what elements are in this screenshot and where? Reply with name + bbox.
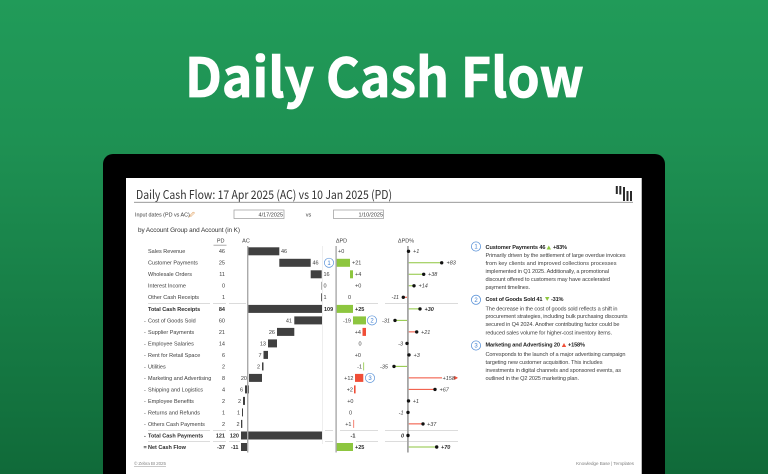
AC waterfall chart bbox=[230, 246, 333, 452]
account names: Sales Revenue bbox=[148, 249, 185, 255]
account names: Net Cash Flow bbox=[148, 445, 187, 451]
AC waterfall chart: 41 bbox=[286, 318, 292, 324]
delta PD percent lollipop chart: +1 bbox=[413, 399, 419, 405]
AC waterfall chart: 16 bbox=[324, 272, 330, 278]
commentary 3: marketing and advertising: targeting new customer acquisition. This includes bbox=[486, 360, 603, 366]
PD column: 121 bbox=[216, 433, 225, 439]
date inputs bbox=[135, 210, 384, 218]
account names: Wholesale Orders bbox=[148, 272, 192, 278]
delta PD percent lollipop chart: +14 bbox=[418, 284, 428, 290]
account names: Others Cash Payments bbox=[148, 422, 205, 428]
delta PD percent lollipop chart: -11 bbox=[391, 295, 399, 301]
commentary 3: marketing and advertising: 3 bbox=[474, 344, 478, 350]
tablet frame bbox=[103, 154, 665, 474]
separators bbox=[148, 303, 458, 442]
commentary 2: cost of goods sold: 2 bbox=[474, 298, 478, 304]
commentary 1: customer payments: implemented in Q1 2025. Additionally, a promotional bbox=[486, 269, 609, 275]
PD column: 1 bbox=[222, 410, 225, 416]
account names: Utilities bbox=[148, 364, 166, 370]
delta PD percent lollipop chart: +1 bbox=[413, 249, 419, 255]
delta PD percent lollipop chart: +83 bbox=[446, 261, 457, 267]
account names: Interest Income bbox=[148, 284, 186, 290]
PD column: 60 bbox=[219, 318, 225, 324]
PD column: 14 bbox=[219, 341, 225, 347]
account names: = bbox=[144, 445, 147, 451]
account names bbox=[144, 249, 211, 451]
delta PD waterfall chart: +2 bbox=[347, 387, 353, 393]
commentary 1: customer payments: 1 bbox=[474, 245, 478, 251]
account names: Total Cash Receipts bbox=[148, 307, 200, 313]
AC waterfall chart: 1 bbox=[237, 410, 240, 416]
PD column: 6 bbox=[222, 353, 225, 359]
delta PD waterfall chart: 0 bbox=[358, 341, 362, 347]
delta PD waterfall chart: +25 bbox=[355, 445, 364, 451]
delta PD percent lollipop chart: +37 bbox=[427, 422, 437, 428]
delta PD percent lollipop chart: +158 bbox=[442, 376, 456, 382]
column headers: ΔPD bbox=[336, 238, 347, 244]
account names: - bbox=[144, 341, 146, 347]
delta PD waterfall chart: -1 bbox=[357, 364, 362, 370]
date inputs: 1/10/2025 bbox=[359, 212, 383, 218]
account names: - bbox=[144, 433, 146, 439]
PD column: 21 bbox=[219, 330, 225, 336]
commentary 1: customer payments: Customer Payments 46 bbox=[486, 245, 546, 251]
delta PD waterfall chart bbox=[335, 246, 366, 452]
delta PD percent lollipop chart: -31 bbox=[382, 318, 390, 324]
delta PD waterfall chart: -1 bbox=[351, 433, 355, 439]
callout markers on chart: 2 bbox=[370, 319, 374, 325]
delta PD waterfall chart: 0 bbox=[349, 410, 352, 416]
PD column bbox=[216, 249, 226, 451]
PD column: 25 bbox=[219, 261, 225, 267]
account names: - bbox=[144, 353, 146, 359]
PD column: 8 bbox=[222, 376, 225, 382]
account names: Shipping and Logistics bbox=[148, 387, 203, 393]
date inputs: Input dates (PD vs AC) bbox=[135, 212, 190, 218]
account names: Total Cash Payments bbox=[148, 433, 203, 439]
date inputs: 4/17/2025 bbox=[259, 212, 283, 218]
PD column: 2 bbox=[222, 364, 225, 370]
delta PD percent lollipop chart: -3 bbox=[398, 341, 404, 347]
account names: Other Cash Receipts bbox=[148, 295, 199, 301]
account names: Marketing and Advertising bbox=[148, 376, 211, 382]
commentary 2: cost of goods sold: secured in Q4 2024. Another contributing factor could be bbox=[486, 322, 620, 328]
callout markers on chart bbox=[324, 258, 377, 382]
delta PD waterfall chart: +0 bbox=[355, 284, 361, 290]
footer links: Knowledge Base | Templates bbox=[576, 461, 635, 467]
column headers: ΔPD% bbox=[398, 238, 414, 244]
commentary 1: customer payments bbox=[471, 242, 626, 291]
delta PD percent lollipop chart: +30 bbox=[424, 307, 434, 313]
callout markers on chart: 3 bbox=[368, 376, 372, 382]
commentary 1: customer payments: payment timelines. bbox=[486, 285, 530, 291]
commentary 2: cost of goods sold: The decrease in the cost of goods sold reflects a shift in bbox=[486, 306, 618, 312]
delta PD percent lollipop chart: -35 bbox=[380, 364, 389, 370]
PD column: 2 bbox=[222, 422, 225, 428]
callout markers on chart: 1 bbox=[327, 261, 331, 267]
AC waterfall chart: 2 bbox=[257, 364, 260, 370]
column headers: AC bbox=[242, 238, 250, 244]
AC waterfall chart: 2 bbox=[238, 399, 241, 405]
column headers: PD bbox=[217, 238, 225, 244]
commentary 2: cost of goods sold: Cost of Goods Sold 41 bbox=[486, 297, 542, 303]
account names: - bbox=[144, 318, 146, 324]
table subtitle: by Account Group and Account (in K) bbox=[138, 227, 240, 234]
AC waterfall chart: 6 bbox=[240, 387, 243, 393]
commentary 1: customer payments: +83% bbox=[553, 245, 567, 251]
commentary 3: marketing and advertising: outlined in the Q2 2025 marketing plan. bbox=[486, 376, 579, 382]
delta PD waterfall chart: +0 bbox=[338, 249, 344, 255]
account names: Employee Benefits bbox=[148, 399, 194, 405]
delta PD waterfall chart: +1 bbox=[345, 422, 352, 428]
delta PD waterfall chart: +21 bbox=[352, 261, 361, 267]
report title: Daily Cash Flow: 17 Apr 2025 (AC) vs 10 Jan 2025 (PD) bbox=[136, 186, 392, 203]
delta PD waterfall chart: -19 bbox=[343, 318, 351, 324]
AC waterfall chart: 26 bbox=[269, 330, 275, 336]
account names: - bbox=[144, 410, 146, 416]
account names: Returns and Refunds bbox=[148, 410, 200, 416]
delta PD waterfall chart: +12 bbox=[344, 376, 354, 382]
commentary 3: marketing and advertising: Corresponds to the launch of a major advertising campaign bbox=[486, 352, 626, 358]
delta PD percent lollipop chart: +67 bbox=[440, 387, 450, 393]
delta PD percent lollipop chart: +38 bbox=[428, 272, 438, 278]
AC waterfall chart: 13 bbox=[260, 341, 266, 347]
AC waterfall chart: 46 bbox=[281, 249, 287, 255]
delta PD waterfall chart: +0 bbox=[355, 353, 361, 359]
AC waterfall chart: 120 bbox=[230, 433, 239, 439]
AC waterfall chart: 2 bbox=[236, 422, 240, 428]
account names: Rent for Retail Space bbox=[148, 353, 200, 359]
PD column: 1 bbox=[222, 295, 225, 301]
commentary 2: cost of goods sold bbox=[471, 295, 628, 336]
footer copyright: © Zebra BI 2025 bbox=[134, 460, 166, 466]
AC waterfall chart: 1 bbox=[324, 295, 327, 301]
account names: - bbox=[144, 364, 146, 370]
account names: Employee Salaries bbox=[148, 341, 194, 347]
icon: Zebra BI logo bbox=[616, 186, 632, 201]
commentary 2: cost of goods sold: procurement strategies, including bulk purchasing discounts bbox=[486, 314, 628, 320]
delta PD waterfall chart: +0 bbox=[347, 399, 354, 405]
date inputs: vs bbox=[306, 212, 312, 218]
AC waterfall chart: -11 bbox=[231, 445, 238, 451]
commentary 3: marketing and advertising: investments in digital channels and sponsored events, as bbox=[486, 368, 621, 374]
AC waterfall chart: 109 bbox=[324, 307, 333, 313]
account names: - bbox=[144, 399, 146, 405]
commentary 3: marketing and advertising bbox=[471, 341, 626, 382]
delta PD percent lollipop chart: +21 bbox=[421, 330, 430, 336]
AC waterfall chart: 7 bbox=[258, 353, 262, 359]
PD column: 46 bbox=[219, 249, 225, 255]
commentary 1: customer payments: Primarily driven by the settlement of large overdue invoices bbox=[486, 253, 626, 259]
PD column: 2 bbox=[222, 399, 225, 405]
commentary 2: cost of goods sold: -31% bbox=[551, 297, 564, 303]
commentary 3: marketing and advertising: Marketing and Advertising 20 bbox=[486, 342, 560, 348]
delta PD waterfall chart: +4 bbox=[355, 272, 361, 278]
delta PD percent lollipop chart bbox=[380, 246, 458, 452]
account names: Customer Payments bbox=[148, 261, 198, 267]
delta PD waterfall chart: 0 bbox=[348, 295, 351, 301]
account names: - bbox=[144, 376, 146, 382]
AC waterfall chart: 46 bbox=[312, 261, 319, 267]
report sheet bbox=[126, 178, 642, 474]
commentary 1: customer payments: discount offered to customers may have accelerated bbox=[486, 277, 610, 283]
main title: Daily Cash Flow bbox=[185, 34, 584, 113]
PD column: 0 bbox=[222, 284, 225, 290]
account names: Cost of Goods Sold bbox=[148, 318, 196, 324]
delta PD percent lollipop chart: +70 bbox=[441, 445, 450, 451]
PD column: 84 bbox=[219, 307, 226, 313]
PD column: -37 bbox=[217, 445, 225, 451]
PD column: 11 bbox=[219, 272, 225, 278]
delta PD percent lollipop chart: +3 bbox=[414, 353, 421, 359]
delta PD percent lollipop chart: 0 bbox=[401, 433, 404, 439]
commentary 2: cost of goods sold: reduced sales volume for higher-cost inventory items. bbox=[486, 330, 612, 336]
column headers bbox=[214, 238, 414, 246]
account names: Supplier Payments bbox=[148, 330, 194, 336]
delta PD percent lollipop chart: -1 bbox=[399, 410, 404, 416]
commentary 1: customer payments: from key clients and improved collections processes bbox=[486, 261, 617, 267]
account names: - bbox=[144, 330, 146, 336]
account names: - bbox=[144, 422, 146, 428]
date inputs: 🖉 bbox=[189, 212, 195, 218]
delta PD waterfall chart: +4 bbox=[355, 330, 361, 336]
delta PD waterfall chart: +25 bbox=[355, 307, 364, 313]
AC waterfall chart: 0 bbox=[324, 284, 327, 290]
account names: - bbox=[144, 387, 146, 393]
commentary 3: marketing and advertising: +158% bbox=[568, 342, 585, 348]
AC waterfall chart: 20 bbox=[241, 376, 247, 382]
PD column: 4 bbox=[222, 387, 225, 393]
